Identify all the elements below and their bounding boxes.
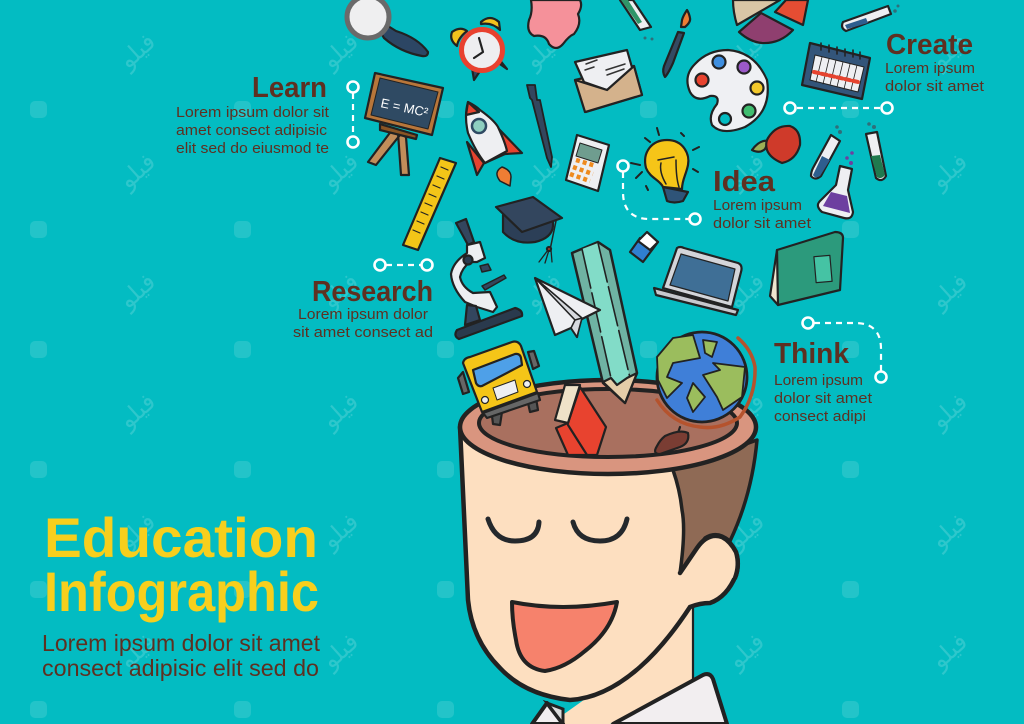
watermark pattern: فيلو bbox=[722, 268, 770, 315]
label: think: Lorem ipsum bbox=[774, 372, 863, 389]
mouth bbox=[512, 602, 617, 671]
label: learn: Lorem ipsum dolor sit bbox=[176, 104, 330, 121]
watermark pattern: فيلو bbox=[316, 268, 364, 315]
label: create bbox=[885, 29, 985, 95]
watermark pattern: فيلو bbox=[925, 388, 973, 435]
watermark pattern: فيلو bbox=[722, 508, 770, 555]
rim of open head bbox=[460, 380, 756, 474]
watermark pattern: فيلو bbox=[113, 508, 161, 555]
icon: blackboard: E = MC² bbox=[379, 95, 430, 120]
watermark pattern: فيلو bbox=[113, 628, 161, 675]
watermark pattern: فيلو bbox=[519, 28, 567, 75]
neck and collar bbox=[532, 600, 727, 724]
watermark pattern: فيلو bbox=[722, 628, 770, 675]
label: think: consect adipi bbox=[774, 408, 866, 425]
icon: envelope and letter bbox=[575, 50, 642, 112]
label: research: Lorem ipsum dolor bbox=[298, 306, 428, 323]
icon: microscope bbox=[451, 219, 522, 339]
watermark pattern: فيلو bbox=[722, 148, 770, 195]
icon: globe bbox=[655, 332, 755, 454]
label: idea bbox=[713, 166, 812, 232]
hair bbox=[673, 440, 757, 573]
watermark pattern: فيلو bbox=[519, 268, 567, 315]
icon: test syringe bbox=[620, 0, 654, 40]
icon: calculator bbox=[566, 135, 609, 191]
watermark pattern: فيلو bbox=[519, 148, 567, 195]
icon: school bus bbox=[458, 342, 540, 425]
label: think: dolor sit amet bbox=[774, 390, 873, 407]
icon: alarm clock bbox=[451, 18, 507, 80]
icon: blackboard bbox=[365, 73, 443, 175]
icon: rocket bbox=[466, 102, 522, 186]
icon: calendar bbox=[802, 43, 870, 99]
watermark pattern: فيلو bbox=[925, 508, 973, 555]
label: idea: Idea bbox=[713, 166, 776, 198]
eyes bbox=[488, 519, 627, 541]
watermark pattern: فيلو bbox=[925, 268, 973, 315]
subtitle text bbox=[42, 630, 321, 681]
character head bbox=[460, 380, 757, 724]
icon: pencil bbox=[572, 242, 637, 403]
icon: pie chart bbox=[733, 0, 808, 43]
watermark pattern: فيلو bbox=[316, 388, 364, 435]
label: learn: amet consect adipisic bbox=[176, 122, 328, 139]
icon: pen bbox=[527, 85, 552, 167]
watermark pattern: فيلو bbox=[722, 28, 770, 75]
icon: paint brush bbox=[663, 10, 690, 77]
subtitle text: Lorem ipsum dolor sit amet bbox=[42, 630, 321, 656]
icon: green book bbox=[770, 232, 843, 305]
icon: test tube top right bbox=[842, 4, 900, 31]
watermark pattern: فيلو bbox=[113, 28, 161, 75]
watermark pattern: فيلو bbox=[113, 148, 161, 195]
label: learn: elit sed do eiusmod te bbox=[176, 140, 329, 157]
icon: red book bbox=[555, 385, 606, 455]
icon: palette bbox=[687, 50, 768, 131]
icon: ruler bbox=[403, 158, 456, 250]
watermark pattern: فيلو bbox=[925, 28, 973, 75]
subtitle text: consect adipisic elit sed do bbox=[42, 655, 319, 681]
watermark pattern: فيلو bbox=[113, 388, 161, 435]
icon: magnifier bbox=[347, 0, 428, 56]
label: create: Create bbox=[886, 29, 973, 61]
watermark pattern: فيلو bbox=[316, 28, 364, 75]
face bbox=[460, 427, 757, 700]
label: think bbox=[774, 338, 873, 425]
label: think: Think bbox=[774, 338, 850, 370]
connector: research bbox=[374, 260, 432, 270]
title bbox=[44, 506, 319, 623]
icon: light bulb bbox=[631, 128, 699, 202]
watermark pattern: فيلو bbox=[722, 388, 770, 435]
icon: paper plane bbox=[535, 278, 600, 337]
connector: idea bbox=[618, 160, 700, 224]
label: create: dolor sit amet bbox=[885, 78, 985, 95]
icon: test tubes and flask bbox=[811, 122, 886, 218]
connector: think bbox=[802, 318, 886, 382]
label: research: sit amet consect ad bbox=[293, 324, 433, 341]
watermark pattern: فيلو bbox=[316, 508, 364, 555]
label: learn: Learn bbox=[252, 72, 327, 104]
label: learn bbox=[176, 72, 330, 157]
icon: laptop bbox=[654, 247, 742, 315]
connector: create bbox=[784, 102, 892, 114]
ear and face outline bbox=[460, 427, 738, 700]
watermark pattern: فيلو bbox=[925, 148, 973, 195]
watermark pattern: فيلو bbox=[113, 268, 161, 315]
icon: eraser bbox=[630, 232, 658, 262]
icon: apple bbox=[752, 126, 800, 163]
watermark pattern: فيلو bbox=[316, 148, 364, 195]
connector: learn bbox=[348, 82, 358, 148]
inside of head bbox=[479, 389, 737, 457]
icon: graduation cap bbox=[496, 197, 562, 263]
label: research: Research bbox=[312, 276, 433, 308]
label: idea: dolor sit amet bbox=[713, 215, 812, 232]
label: research bbox=[293, 276, 433, 341]
watermark pattern: فيلو bbox=[925, 628, 973, 675]
label: create: Lorem ipsum bbox=[885, 60, 975, 77]
label: idea: Lorem ipsum bbox=[713, 197, 802, 214]
title: Infographic bbox=[44, 560, 319, 623]
icon: brain bbox=[528, 0, 581, 48]
title: Education bbox=[44, 506, 318, 569]
watermark pattern: فيلو bbox=[316, 628, 364, 675]
